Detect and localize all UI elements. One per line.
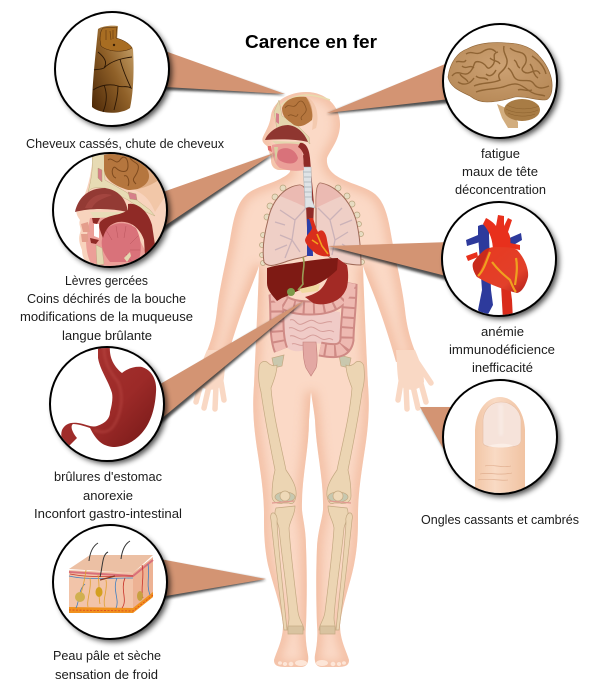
icon: finger with nail — [475, 397, 525, 500]
text: mouth symptoms: Coins déchirés de la bouche — [27, 292, 186, 306]
title: Carence en fer — [245, 32, 377, 52]
panel: brain circle — [443, 24, 560, 141]
text: nail symptoms: Ongles cassants et cambrés — [421, 513, 579, 527]
icon: heart — [466, 215, 528, 320]
text: stomach symptoms: brûlures d'estomac — [54, 470, 162, 484]
left hand — [191, 350, 226, 409]
stomach (small) — [305, 258, 348, 304]
callout wedge: hair — [165, 51, 285, 95]
skeleton: right leg bones — [319, 355, 364, 634]
text: brain symptoms: fatigue — [481, 147, 520, 161]
text: hair symptoms: Cheveux cassés, chute de cheveux — [26, 137, 225, 151]
icon: brain — [448, 43, 552, 128]
right hand — [396, 350, 431, 409]
panel: mouth and nasal cavity circle — [53, 153, 170, 270]
rectum — [303, 342, 317, 376]
text: mouth symptoms: modifications de la muqueuse — [20, 310, 193, 324]
illustration: head cross-section — [75, 153, 170, 270]
callout wedge: heart — [328, 242, 450, 281]
icon: broken hair strand — [92, 26, 134, 113]
pancreas and gallbladder — [287, 257, 320, 296]
text: skin symptoms: sensation de froid — [55, 668, 158, 682]
panel: hair circle — [55, 12, 172, 129]
text: heart symptoms — [449, 325, 555, 375]
text: skin symptoms — [53, 649, 161, 682]
panel: skin circle — [53, 525, 170, 642]
text: stomach symptoms: Inconfort gastro-intestinal — [34, 507, 182, 521]
human body figure — [191, 92, 431, 667]
colon — [276, 284, 350, 351]
text: mouth symptoms: Lèvres gercées — [65, 274, 148, 288]
body silhouette — [204, 92, 418, 667]
lungs — [260, 183, 364, 266]
callout wedge: skin — [160, 559, 266, 600]
text: heart symptoms: immunodéficience — [449, 343, 555, 357]
head cross-section — [265, 95, 330, 171]
callout wedge: mouth — [160, 153, 275, 234]
text: brain symptoms: maux de tête — [462, 165, 538, 179]
icon: skin block — [69, 541, 153, 613]
text: heart symptoms: inefficacité — [472, 361, 533, 375]
text: brain symptoms: déconcentration — [455, 183, 546, 197]
toes — [278, 660, 346, 666]
panel: fingernail circle — [443, 380, 560, 500]
small intestine — [282, 310, 340, 351]
panel: heart circle — [442, 202, 559, 320]
text: heart symptoms: anémie — [481, 325, 524, 339]
skeleton: left leg bones — [259, 355, 304, 634]
text: stomach symptoms: anorexie — [83, 489, 133, 503]
text: brain symptoms — [455, 147, 546, 197]
callout wedge: brain — [327, 62, 450, 114]
trachea and esophagus — [303, 155, 315, 228]
callout wedge: stomach — [155, 300, 305, 429]
text: mouth symptoms — [20, 274, 193, 343]
callout wedge: nail — [420, 407, 455, 464]
panel: stomach circle — [50, 345, 167, 464]
text: mouth symptoms: langue brûlante — [62, 329, 152, 343]
text: skin symptoms: Peau pâle et sèche — [53, 649, 161, 663]
heart (small) — [305, 218, 330, 256]
text: stomach symptoms — [34, 470, 182, 521]
icon: stomach — [61, 345, 156, 447]
liver — [267, 258, 338, 301]
